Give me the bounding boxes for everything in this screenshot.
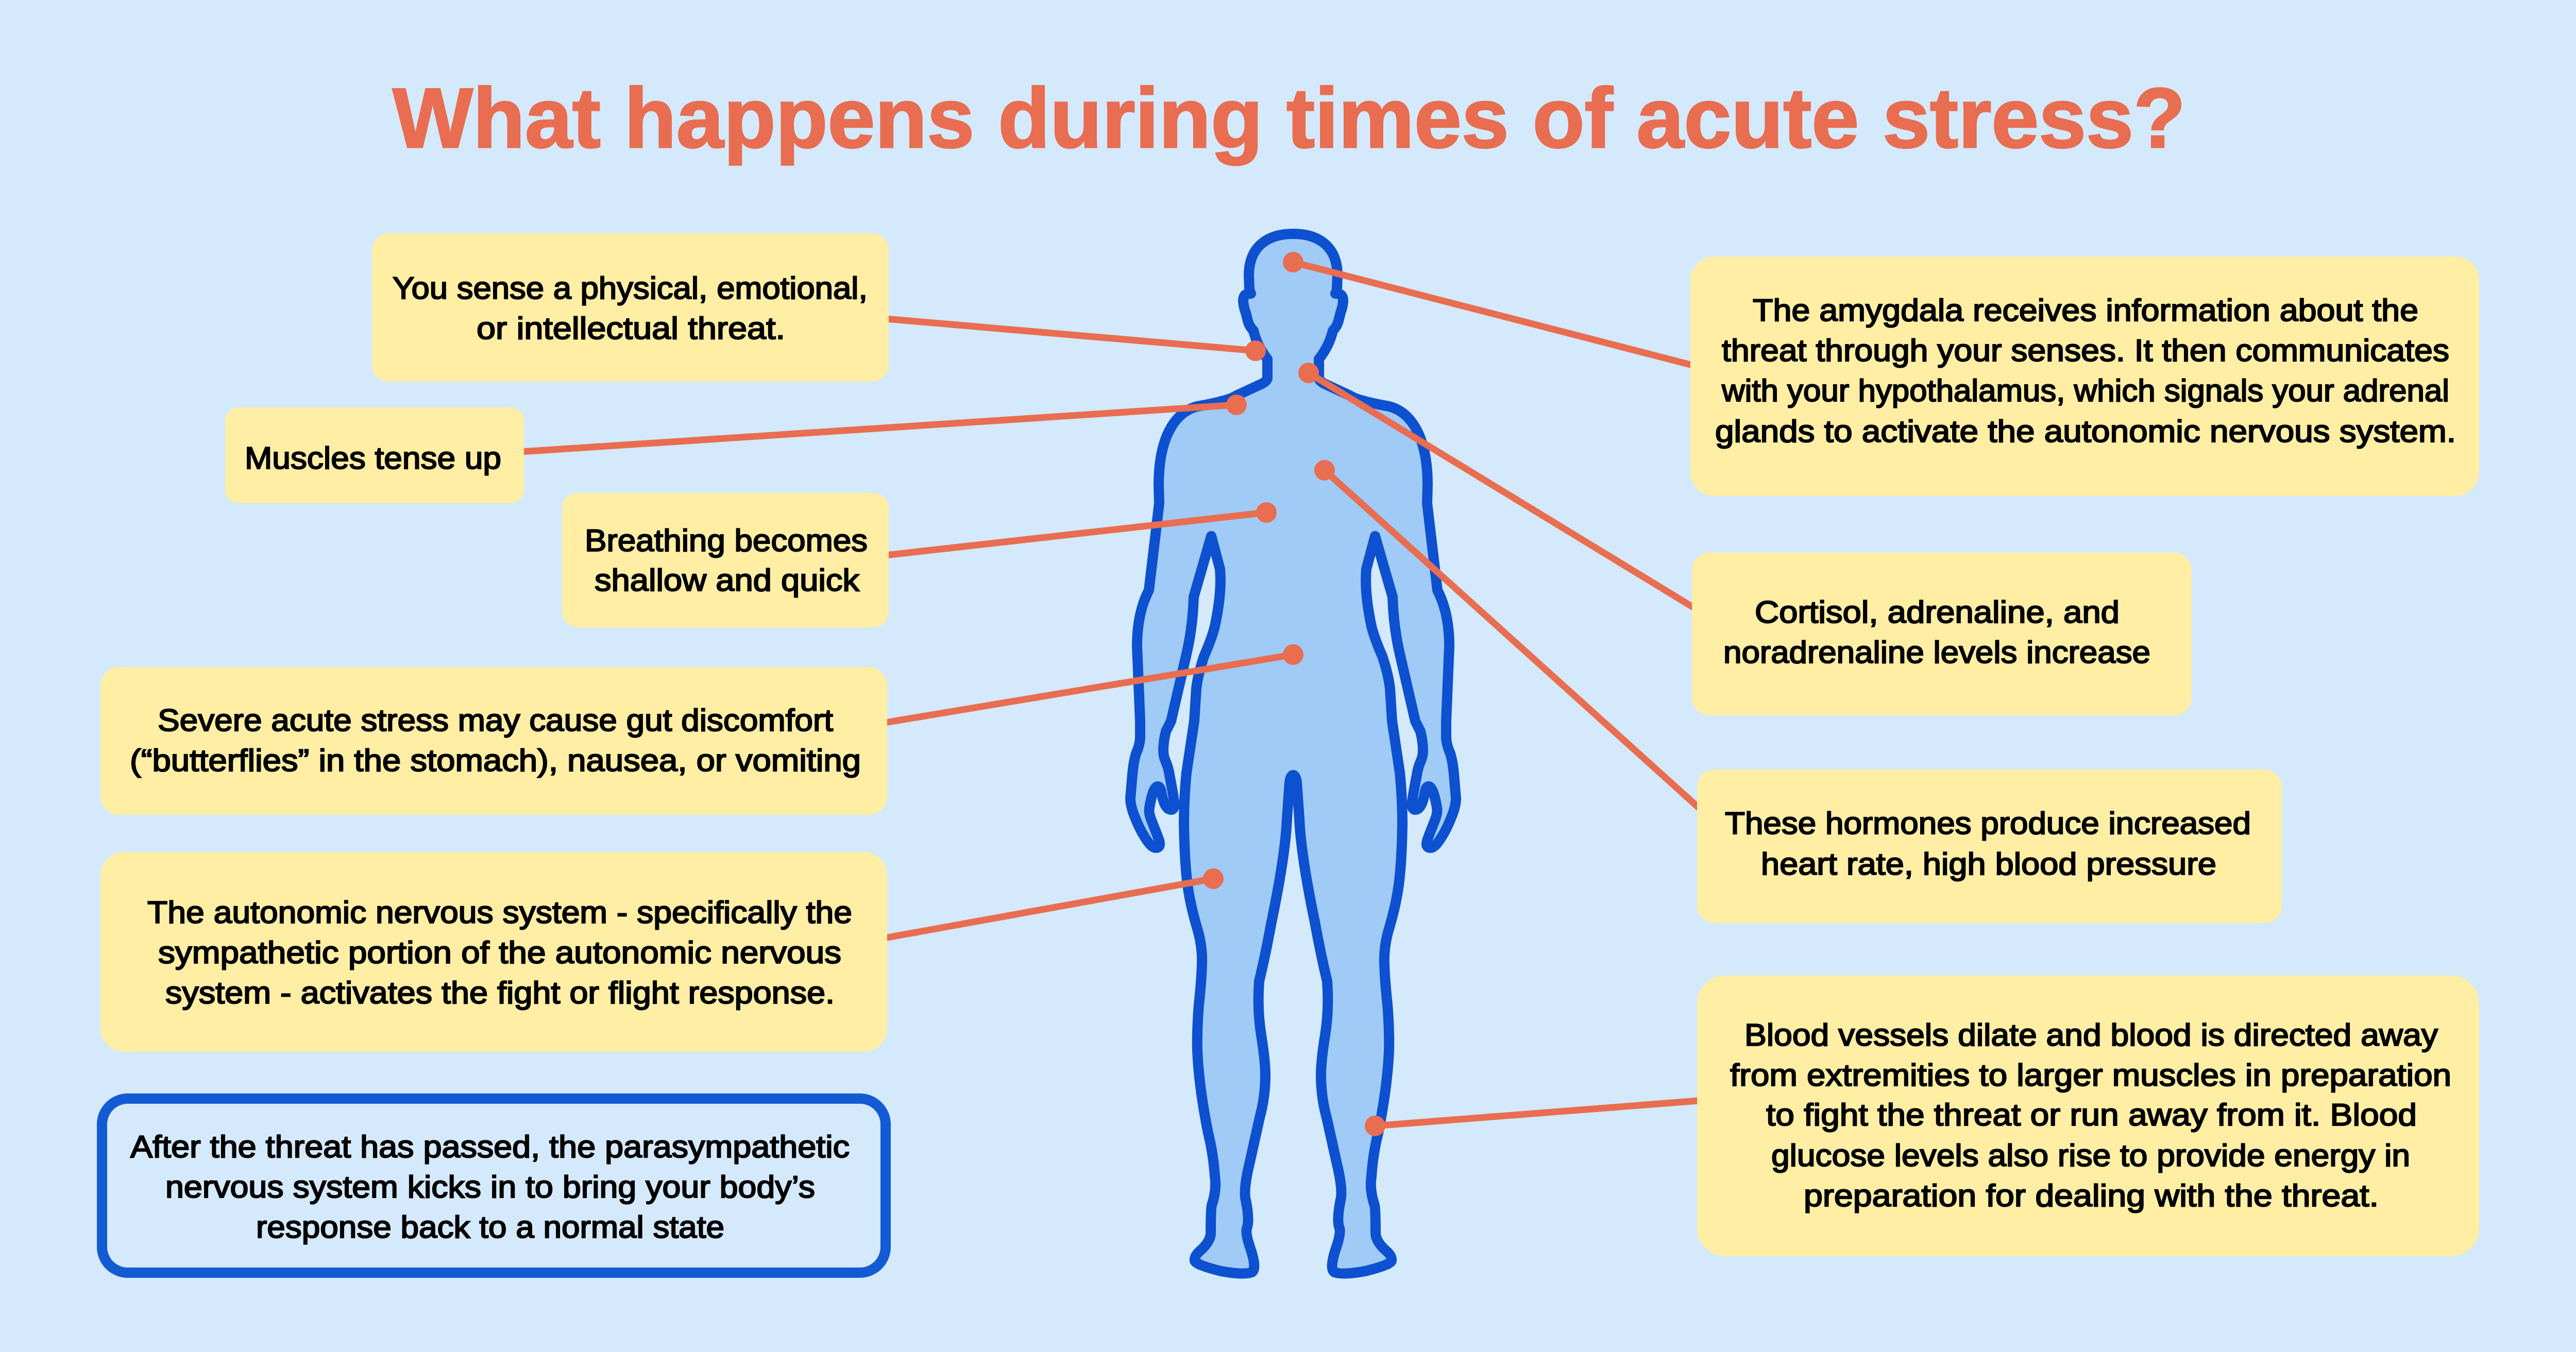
panel: blood vessels: Blood vessels dilate and blood is directed away: [1744, 1018, 2438, 1052]
connector: breathing: [886, 502, 1277, 555]
panel: hormones: Cortisol, adrenaline, and: [1755, 595, 2120, 629]
panel: amygdala: with your hypothalamus, which signals your adrenal: [1721, 373, 2449, 408]
connector: gut: [885, 644, 1303, 723]
panel: autonomic nervous system: [100, 852, 887, 1052]
connector: heart rate: [1314, 460, 1699, 808]
panel: parasympathetic: [102, 1099, 886, 1273]
panel: threat sensed: or intellectual threat.: [477, 311, 785, 346]
panel: gut: (“butterflies” in the stomach), nausea, or vomiting: [130, 743, 861, 778]
figure: left half: [1130, 234, 1293, 1274]
panel: hormones: [1692, 553, 2192, 715]
panel: gut: [100, 667, 887, 815]
panel: blood vessels: to fight the threat or run away from it. Blood: [1766, 1098, 2417, 1132]
panel: amygdala: [1690, 256, 2479, 496]
panel: breathing: [562, 493, 889, 627]
panel: breathing: shallow and quick: [595, 563, 860, 597]
panel: amygdala: threat through your senses. It then communicates: [1722, 333, 2449, 368]
panel: gut: Severe acute stress may cause gut discomfort: [158, 703, 833, 738]
panel: autonomic nervous system: sympathetic portion of the autonomic nervous: [158, 935, 841, 970]
panel: hormones: noradrenaline levels increase: [1723, 635, 2150, 670]
panel: blood vessels: from extremities to larger muscles in preparation: [1730, 1058, 2451, 1092]
panel: parasympathetic: nervous system kicks in to bring your body’s: [165, 1170, 815, 1204]
panel: muscles: [225, 407, 524, 503]
panel: heart rate: heart rate, high blood pressure: [1761, 847, 2216, 881]
connector: nervous system: [885, 868, 1224, 938]
panel: threat sensed: [372, 233, 889, 382]
panel: parasympathetic: response back to a normal state: [256, 1210, 724, 1244]
figure: right half: [1293, 234, 1456, 1274]
panel: threat sensed: You sense a physical, emotional,: [393, 271, 868, 305]
connector: muscles: [521, 395, 1247, 452]
panel: blood vessels: [1697, 976, 2479, 1256]
panel: amygdala: glands to activate the autonomic nervous system.: [1715, 414, 2456, 449]
panel: parasympathetic: After the threat has passed, the parasympathetic: [130, 1129, 850, 1164]
body figure: [1130, 234, 1456, 1274]
panel: heart rate: These hormones produce increased: [1725, 806, 2251, 841]
panel: autonomic nervous system: The autonomic nervous system - specifically the: [147, 895, 852, 930]
panel: blood vessels: preparation for dealing with the threat.: [1804, 1178, 2379, 1213]
connector: amygdala: [1283, 252, 1692, 365]
panel: autonomic nervous system: system - activates the fight or flight response.: [165, 976, 835, 1010]
title: What happens during times of acute stress?: [393, 71, 2185, 165]
panel: amygdala: The amygdala receives information about the: [1753, 293, 2418, 328]
connector: hormones levels: [1298, 363, 1694, 608]
panel: muscles: Muscles tense up: [245, 441, 501, 475]
connector lines and dots: [521, 252, 1699, 1136]
connector: sense threat: [886, 319, 1266, 361]
panel: heart rate: [1697, 769, 2282, 923]
panel: blood vessels: glucose levels also rise to provide energy in: [1771, 1138, 2410, 1173]
panel: breathing: Breathing becomes: [585, 523, 868, 558]
connector: blood vessels: [1365, 1101, 1699, 1136]
